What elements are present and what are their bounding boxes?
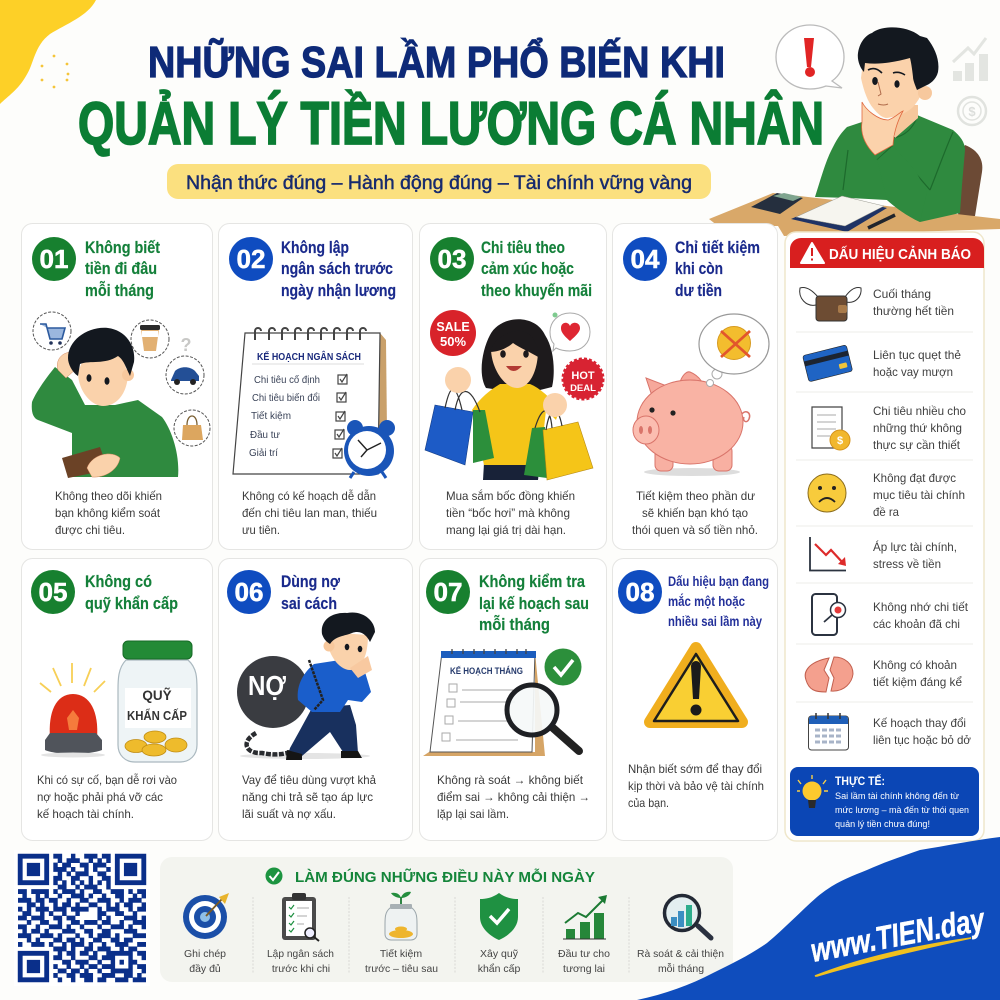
number badge 01: 01	[40, 244, 68, 274]
face details	[868, 69, 905, 105]
sign 5: falling chart	[810, 537, 957, 571]
item: review monthly: mỗi tháng	[658, 962, 704, 975]
number badge 05: 05	[38, 577, 68, 607]
item: invest future: tương lai	[563, 963, 605, 975]
heading 07	[479, 573, 589, 634]
item: save first	[365, 892, 438, 975]
heading 08: Dấu hiệu bạn đang	[668, 573, 769, 589]
card 03	[420, 224, 606, 550]
heading 07: Không kiểm tra	[479, 573, 586, 591]
description 03: Mua sắm bốc đồng khiến	[446, 488, 575, 503]
heading 01: Không biết	[85, 239, 160, 257]
description 06: lãi suất và nợ xấu.	[242, 807, 336, 821]
heading 04: Chỉ tiết kiệm	[675, 239, 760, 257]
item: review monthly: Rà soát & cải thiện	[637, 948, 724, 960]
sign 3: receipt and coin: $	[837, 435, 843, 447]
heading 05: Không có	[85, 573, 152, 591]
description 01: bạn không kiểm soát	[55, 506, 161, 520]
sign 2: credit card: Liên tục quẹt thẻ	[873, 348, 961, 362]
check badge	[544, 648, 582, 686]
header illustration: thinking man at desk	[709, 25, 1000, 236]
illustration: budget notepad: Đầu tư	[250, 429, 280, 441]
sign 4: sad face	[808, 471, 965, 519]
sign 6: phone with magnifier	[812, 594, 969, 635]
description 07	[437, 773, 590, 821]
pen	[868, 215, 895, 228]
description 03: tiền “bốc hơi” mà không	[446, 506, 570, 520]
heading 06: sai cách	[281, 595, 337, 613]
heading 04	[675, 239, 760, 300]
description 05: kế hoạch tài chính.	[37, 807, 134, 821]
heading 03: Chi tiêu theo	[481, 239, 565, 257]
warning header: DẤU HIỆU CẢNH BÁO	[829, 245, 971, 263]
sign 3: receipt and coin: thực sự cần thiết	[873, 438, 961, 452]
hot deal badge	[563, 359, 603, 399]
heading 03: theo khuyến mãi	[481, 282, 592, 300]
description 05: Khi có sự cố, bạn dễ rơi vào	[37, 772, 177, 787]
number badge 04: 04	[630, 244, 660, 274]
item: budget first: Lập ngân sách	[267, 948, 334, 960]
illustration: budget notepad: Chi tiêu biến đổi	[252, 392, 320, 404]
head	[861, 55, 923, 118]
faded chart icon	[953, 38, 988, 81]
card 05	[22, 558, 212, 840]
magnifier	[507, 685, 579, 751]
sign 1: flying wallet: Cuối tháng	[873, 287, 931, 301]
number badge 04	[623, 237, 667, 281]
heading 04: khi còn	[675, 260, 723, 278]
sign 4: sad face: Không đạt được	[873, 471, 956, 485]
legs	[288, 705, 358, 756]
card 04	[612, 224, 778, 550]
heading 02: ngân sách trước	[281, 260, 393, 278]
illustration: budget notepad	[233, 328, 395, 478]
item: invest future	[558, 895, 610, 975]
illustration: monthly plan calendar: KẾ HOẠCH THÁNG	[450, 666, 523, 676]
description 06: Vay để tiêu dùng vượt khả	[242, 773, 376, 787]
panel heading: LÀM ĐÚNG NHỮNG ĐIỀU NÀY MỖI NGÀY	[295, 868, 595, 886]
sign 5: falling chart: Áp lực tài chính,	[873, 539, 957, 554]
speech bubble with exclamation	[776, 25, 844, 89]
sign 5: falling chart: stress về tiền	[873, 557, 941, 571]
sign 6: phone with magnifier: các khoản đã chi	[873, 617, 960, 631]
sign 6: phone with magnifier: Không nhớ chi tiết	[873, 600, 969, 614]
yellow corner blob	[0, 0, 96, 104]
number badge 07	[426, 570, 470, 614]
number badge 08: 08	[626, 577, 654, 607]
sign 4: sad face: đề ra	[873, 505, 899, 519]
thought bubble with crossed coin	[699, 314, 769, 386]
description 08	[628, 762, 764, 810]
item: budget first	[267, 893, 334, 975]
heading 07: lại kế hoạch sau	[479, 595, 589, 613]
number badge 06	[227, 570, 271, 614]
sign 7: broken piggy bank	[805, 657, 962, 692]
number badge 07: 07	[434, 577, 462, 607]
alarm clock	[344, 420, 395, 478]
panel: warning signs	[785, 232, 984, 841]
description 03: mang lại giá trị dài hạn.	[446, 523, 566, 537]
item: save first: trước – tiêu sau	[365, 963, 438, 975]
desk	[709, 193, 1000, 236]
illustration: emergency fund jar: KHẨN CẤP	[127, 708, 187, 723]
heading 02: ngày nhận lương	[281, 282, 396, 300]
callout: reality note: THỰC TẾ:	[835, 773, 885, 788]
heading 07: mỗi tháng	[479, 615, 550, 634]
card 01	[22, 224, 212, 550]
blue wave corner	[637, 837, 1000, 1000]
number badge 06: 06	[234, 577, 264, 607]
heading 01	[85, 239, 160, 300]
heading 02	[281, 239, 396, 300]
faded dollar coin: $	[968, 104, 976, 119]
sign 2: credit card	[803, 345, 961, 382]
item: budget first: trước khi chi	[272, 963, 330, 975]
heading 04: dư tiền	[675, 282, 722, 300]
illustration: budget notepad: Giải trí	[249, 447, 278, 459]
description 08: của bạn.	[628, 796, 669, 810]
item: build fund	[478, 893, 520, 975]
sign 3: receipt and coin: những thứ không	[873, 421, 962, 435]
description 03	[446, 488, 575, 537]
card 08	[612, 558, 778, 840]
sign 7: broken piggy bank: Không có khoản	[873, 658, 957, 672]
heading 08: mắc một hoặc	[668, 592, 745, 609]
number badge 08	[618, 570, 662, 614]
hand on cheek	[350, 656, 372, 678]
illustration: emergency fund jar	[118, 641, 197, 762]
calculator	[751, 193, 803, 214]
illustration: budget notepad: Chi tiêu cố định	[254, 374, 320, 386]
heading 06	[281, 573, 340, 613]
sign 7: broken piggy bank: tiết kiệm đáng kể	[873, 675, 962, 689]
icon: warning triangle	[650, 648, 742, 722]
description 08: Nhận biết sớm để thay đổi	[628, 762, 762, 776]
heading 02: Không lập	[281, 239, 349, 257]
illustration: confused man with wallet: ?	[180, 335, 192, 355]
description 05: nợ hoặc phải phá vỡ các	[37, 790, 163, 804]
number badge 03	[430, 237, 474, 281]
number badge 02	[229, 237, 273, 281]
item: invest future: Đầu tư cho	[558, 948, 610, 960]
hot deal badge: DEAL	[570, 383, 596, 394]
description 02: ưu tiên.	[242, 523, 280, 537]
item: record fully: Ghi chép	[184, 948, 226, 960]
left bags	[425, 367, 494, 465]
callout: reality note: quản lý tiền chưa đúng!	[835, 819, 930, 830]
illustration: woman shopping	[425, 310, 603, 480]
card 02	[218, 224, 412, 550]
hair	[858, 27, 938, 90]
heading 06: Dùng nợ	[281, 573, 340, 591]
heading 05	[85, 573, 178, 613]
hand at chin	[862, 102, 903, 155]
description 06: năng chi trả sẽ tạo áp lực	[242, 790, 373, 804]
chair	[958, 145, 982, 216]
illustration: emergency fund jar: QUỸ	[142, 688, 172, 703]
sweater	[815, 115, 965, 222]
sign 8: calendar: Kế hoạch thay đổi	[873, 716, 966, 730]
sign 2: credit card: hoặc vay mượn	[873, 365, 953, 379]
description 05	[37, 772, 177, 821]
heading 08	[668, 573, 769, 629]
open book	[791, 196, 887, 232]
hair	[322, 612, 375, 644]
illustration: debt ball and chained man: NỢ	[248, 670, 286, 701]
card 07	[420, 558, 606, 840]
sale badge	[430, 310, 476, 356]
number badge 01	[32, 237, 76, 281]
description 02: đến chi tiêu lan man, thiếu	[242, 506, 377, 520]
heading 03	[481, 239, 592, 300]
heading 01: tiền đi đâu	[85, 260, 157, 278]
illustration: budget notepad: KẾ HOẠCH NGÂN SÁCH	[257, 350, 361, 363]
sign 1: flying wallet: thường hết tiền	[873, 304, 954, 318]
description 04: thói quen và số tiền nhỏ.	[632, 523, 758, 537]
QR code	[14, 850, 150, 986]
illustration: monthly plan calendar	[423, 648, 582, 756]
description 07: lặp lại sai lầm.	[437, 807, 509, 821]
description 01: được chi tiêu.	[55, 523, 125, 537]
torso	[298, 660, 371, 712]
item: save first: Tiết kiệm	[380, 948, 422, 960]
heading 08: nhiều sai lầm này	[668, 613, 762, 629]
chain	[247, 733, 290, 754]
sale badge: SALE	[436, 320, 470, 334]
neck	[893, 105, 918, 138]
title	[78, 36, 824, 157]
description 04	[632, 489, 758, 537]
sign 4: sad face: mục tiêu tài chính	[873, 488, 965, 502]
description 01	[55, 489, 162, 537]
heart bubble	[550, 312, 590, 351]
callout: reality note: mức lương – mà đến từ thói quen	[835, 805, 969, 816]
description 02: Không có kế hoạch dễ dẫn	[242, 488, 376, 503]
sign 3: receipt and coin: Chi tiêu nhiều cho	[873, 404, 966, 418]
illustration: siren	[40, 663, 105, 758]
card 06	[218, 558, 412, 840]
callout: reality note	[790, 767, 979, 836]
number badge 05	[31, 570, 75, 614]
description 07: Không rà soát → không biết	[437, 773, 584, 787]
faded dollar coin	[958, 97, 986, 125]
description 02	[242, 488, 377, 537]
description 04: Tiết kiệm theo phần dư	[636, 489, 755, 503]
sale badge: 50%	[440, 334, 466, 349]
subtitle pill	[167, 164, 711, 199]
illustration: piggy bank with thought	[633, 314, 769, 476]
description 08: kịp thời và bảo vệ tài chính	[628, 779, 764, 793]
hot deal badge: HOT	[571, 370, 595, 382]
sign 3: receipt and coin	[812, 404, 966, 452]
warning header	[790, 238, 984, 268]
number badge 03: 03	[438, 244, 466, 274]
yellow underline	[815, 938, 971, 976]
heading 03: cảm xúc hoặc	[481, 260, 574, 278]
illustration: debt ball and chained man	[237, 612, 375, 760]
item: build fund: Xây quỹ	[480, 948, 519, 960]
number badge 02: 02	[236, 244, 266, 274]
description 04: sẽ khiến bạn khó tạo	[642, 506, 748, 520]
item: review monthly	[637, 896, 724, 975]
right bags	[524, 393, 593, 480]
icon: light bulb	[797, 775, 828, 808]
title line 1: NHỮNG SAI LẦM PHỔ BIẾN KHI	[148, 36, 725, 87]
forearm	[877, 146, 927, 222]
description 06	[242, 773, 376, 821]
panel: do the right things daily	[160, 857, 733, 982]
description 07: điểm sai → không cải thiện →	[437, 790, 590, 804]
description 01: Không theo dõi khiến	[55, 489, 162, 503]
item: record fully: đầy đủ	[189, 963, 221, 975]
callout: reality note: Sai lầm tài chính không đến từ	[835, 791, 960, 802]
sign 1: flying wallet	[800, 287, 954, 321]
head	[326, 632, 368, 670]
item: build fund: khẩn cấp	[478, 963, 520, 975]
heading 05: quỹ khẩn cấp	[85, 595, 178, 613]
illustration: budget notepad: Tiết kiệm	[251, 410, 291, 422]
sign 8: calendar: liên tục hoặc bỏ dở	[873, 733, 971, 747]
sign 8: calendar	[808, 713, 971, 750]
subtitle pill: Nhận thức đúng – Hành động đúng – Tài chính vững vàng	[186, 173, 692, 194]
illustration: confused man with wallet	[32, 312, 210, 478]
heading 01: mỗi tháng	[85, 281, 154, 300]
item: record fully	[183, 893, 229, 975]
